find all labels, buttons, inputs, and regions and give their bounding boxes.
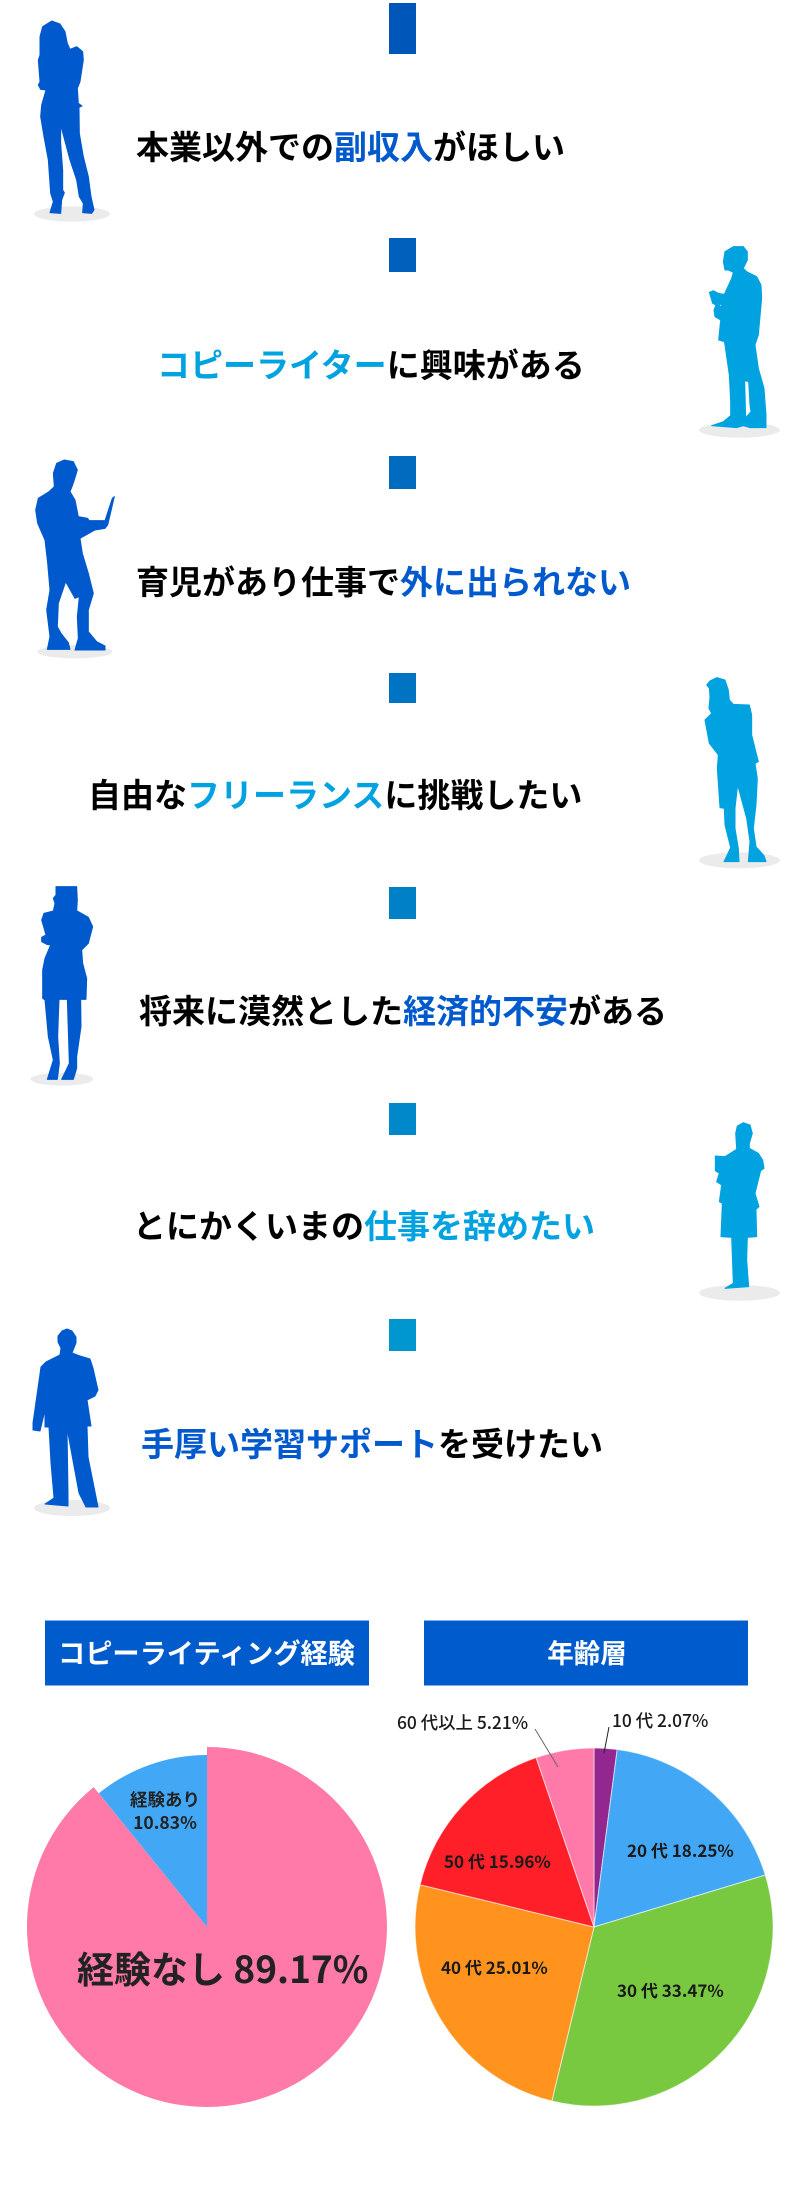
pie labels: age group: 20 代 18.25% (627, 1837, 734, 1862)
figure 6: woman with folder silhouette (699, 1123, 780, 1301)
heading: copywriting experience: コピーライティング経験 (58, 1631, 355, 1671)
pie labels: age group: 60 代以上 5.21% (397, 1710, 528, 1735)
text: line 1: 本業以外での副収入がほしい (136, 121, 565, 169)
connector blocks (389, 3, 416, 1351)
heading: age group (424, 1620, 748, 1686)
pie chart: age group (415, 1748, 773, 2106)
heading: copywriting experience (45, 1620, 369, 1686)
text: line 7: 手厚い学習サポートを受けたい (141, 1418, 603, 1466)
text: line 2: コピーライターに興味がある (157, 339, 585, 387)
pie labels: age group (397, 1708, 734, 2002)
figure 7: man in suit silhouette (33, 1329, 110, 1516)
heading: age group: 年齢層 (547, 1632, 627, 1671)
pie labels: age group: 50 代 15.96% (444, 1848, 551, 1873)
pie chart: copywriting experience: 10.83% (133, 1810, 197, 1835)
pie chart: copywriting experience (27, 1747, 387, 2107)
pie labels: age group: 10 代 2.07% (612, 1708, 708, 1733)
pie chart: copywriting experience: 経験なし 89.17% (77, 1940, 368, 1994)
figure 5: woman in skirt silhouette (31, 887, 93, 1086)
figure 4: man in shorts silhouette (699, 678, 780, 868)
figure 2: man silhouette (699, 247, 780, 438)
pie labels: age group: 30 代 33.47% (617, 1977, 724, 2002)
pie chart: copywriting experience: 経験あり (130, 1787, 200, 1812)
pie labels: age group: 40 代 25.01% (441, 1954, 548, 1979)
text: line 6: とにかくいまの仕事を辞めたい (133, 1200, 595, 1248)
text: line 3: 育児があり仕事で外に出られない (136, 556, 631, 604)
text: line 4: 自由なフリーランスに挑戦したい (88, 769, 582, 817)
figure 3: man with laptop silhouette (36, 460, 114, 658)
leader lines (535, 1727, 609, 1767)
text: line 5: 将来に漠然とした経済的不安がある (139, 985, 667, 1033)
figure 1: woman silhouette (34, 21, 110, 222)
